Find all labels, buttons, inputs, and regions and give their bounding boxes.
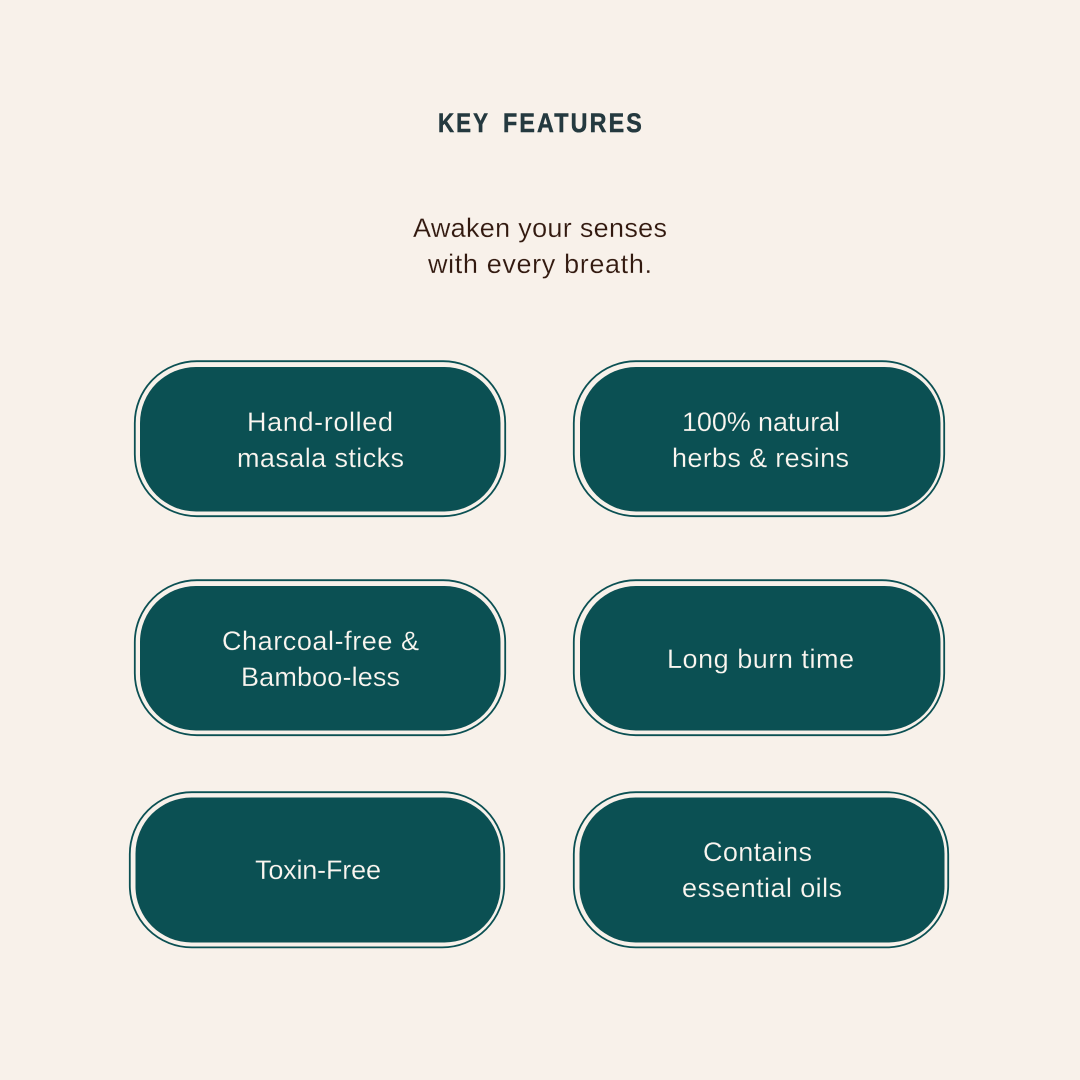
subtitle [413, 213, 667, 279]
panel: toxin-free: Toxin-Free [255, 855, 381, 885]
panel: contains essential oils: Contains [703, 837, 812, 867]
panel: long burn time [574, 580, 944, 735]
panel: hand-rolled masala sticks: Hand-rolled [247, 407, 393, 437]
panel: natural herbs and resins: 100% natural [682, 407, 840, 437]
panel: contains essential oils: essential oils [682, 873, 842, 903]
panel: long burn time: Long burn time [667, 644, 854, 674]
title: FEATURES [503, 108, 644, 138]
title [438, 108, 644, 138]
panel: hand-rolled masala sticks: masala sticks [237, 443, 404, 473]
panel: hand-rolled masala sticks [135, 361, 505, 516]
subtitle: Awaken your senses [413, 213, 667, 243]
panel: natural herbs and resins [574, 361, 944, 516]
panel: contains essential oils [574, 792, 948, 947]
panel: charcoal-free and bamboo-less: Charcoal-free & [222, 626, 419, 656]
panel: toxin-free [130, 792, 504, 947]
title: KEY [438, 108, 490, 138]
panel: charcoal-free and bamboo-less [135, 580, 505, 735]
panel: charcoal-free and bamboo-less: Bamboo-less [241, 662, 400, 692]
subtitle: with every breath. [427, 249, 652, 279]
panel: natural herbs and resins: herbs & resins [672, 443, 849, 473]
